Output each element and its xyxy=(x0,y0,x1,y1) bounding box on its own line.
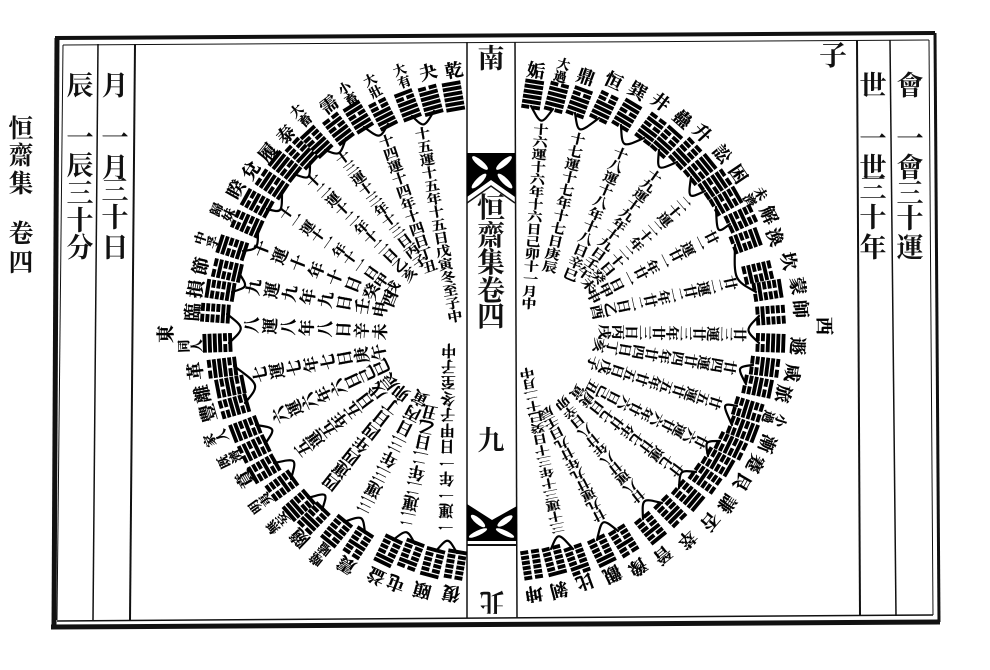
diagram: right half hexagram ring: ䷋ xyxy=(668,476,711,518)
diagram: left half hexagram ring: ䷕ xyxy=(240,451,285,489)
diagram: right half hexagram ring: ䷟ xyxy=(586,83,623,127)
diagram: right half hexagram ring: ䷢ xyxy=(631,508,672,551)
diagram: right half hexagram ring: ䷷ xyxy=(739,372,780,402)
column: 世 一世三十年: 年 xyxy=(860,233,886,263)
hexagram name labels: right half: 小過 xyxy=(759,407,790,429)
column: 辰 一辰三十分: 辰 xyxy=(66,71,94,101)
hexagram name labels: right half: 謙 xyxy=(715,490,741,516)
radial year text: left half: 一運一年一日甲子冬至子中 xyxy=(439,343,458,535)
hexagram name labels: right half: 漸 xyxy=(756,430,780,456)
radial year text: right half: 廿八運廿八年廿八日辛卯 xyxy=(553,392,649,505)
hexagram name labels: right half xyxy=(524,55,834,605)
diagram: left half hexagram ring: ䷥ xyxy=(233,183,278,221)
hexagram name labels: left half: 大壯 xyxy=(359,71,385,101)
hexagram name labels: left half: 兌 xyxy=(237,158,263,184)
hexagram name labels: right half: 萃 xyxy=(675,526,702,553)
diagram: left half hexagram ring: ䷀ xyxy=(439,74,467,115)
diagram: right half hexagram ring: ䷞ xyxy=(746,353,787,380)
side title: 恒齋集 卷四: 集 xyxy=(8,170,34,198)
diagram: right half hexagram ring: ䷭ xyxy=(665,131,708,174)
hexagram name labels: right half: 蠱 xyxy=(669,105,696,131)
column: 月 一月三十日: 月 xyxy=(102,153,128,183)
radial year text: left half: 三運三年三日丙寅 xyxy=(354,386,434,518)
hexagram name labels: left half: 東 xyxy=(156,325,174,345)
hexagram name labels: left half: 節 xyxy=(189,255,212,279)
diagram: right half hexagram ring: ䷯ xyxy=(631,105,672,149)
hexagram name labels: left half: 豐 xyxy=(196,402,219,426)
diagram: right half hexagram ring: ䷬ xyxy=(650,491,693,534)
hexagram name labels: left half: 益 xyxy=(364,565,390,590)
hexagram name labels: right half: 師 xyxy=(791,297,811,319)
hexagram name labels: left half: 歸妹 xyxy=(207,201,238,226)
radial year text: left half xyxy=(243,126,463,535)
hexagram name labels: right half: 升 xyxy=(689,118,716,145)
hexagram name labels: left half: 明夷 xyxy=(246,489,277,518)
hexagram name labels: left half: 震 xyxy=(334,553,360,579)
hexagram name labels: left half: 損 xyxy=(184,279,206,301)
radial year text: right half: 廿一運廿一年廿一日甲申 xyxy=(583,226,721,306)
column: 月 一月三十日: 月 xyxy=(102,71,128,101)
hexagram name labels: right half: 鼎 xyxy=(573,64,598,88)
hexagram name labels: left half: 同人 xyxy=(177,339,204,355)
spine title: 恒齋集卷四: 四 xyxy=(477,302,505,333)
spine title: 恒齋集卷四: 集 xyxy=(477,247,505,279)
diagram: left half hexagram ring: ䷹ xyxy=(248,163,292,203)
spine title: 恒齋集卷四: 齋 xyxy=(477,220,505,252)
hexagram name labels: right half: 未濟 xyxy=(739,183,770,210)
column: 月 一月三十日: 日 xyxy=(102,233,128,263)
diagram: right half hexagram ring: ䷿ xyxy=(705,181,750,219)
radial year text: left half: 七運七年七日庚午 xyxy=(250,342,388,386)
column: 世 一世三十年 xyxy=(860,71,886,263)
column: 辰 一辰三十分: 辰 xyxy=(66,151,94,181)
hexagram name labels: left half: 無妄 xyxy=(263,509,294,539)
side title: 恒齋集 卷四: 卷 xyxy=(8,220,34,248)
heading: 子: 子 xyxy=(819,41,847,72)
column: 月 一月三十日: 十 xyxy=(102,203,128,233)
hexagram name labels: left half: 復 xyxy=(440,583,463,606)
spine title: 恒齋集卷四 xyxy=(477,192,505,333)
diagram: right half hexagram ring: ䷧ xyxy=(721,200,765,236)
hexagram name labels: left half: 睽 xyxy=(222,177,248,204)
diagram: right half hexagram ring: ䷑ xyxy=(647,119,689,162)
hexagram name labels: left half: 中孚 xyxy=(191,230,221,252)
side title: 恒齋集 卷四: 齋 xyxy=(8,142,34,170)
hexagram name labels: right half: 剝 xyxy=(548,579,572,601)
radial year text: right half: 廿六運廿六年廿六日己丑 xyxy=(583,375,711,451)
diagram: right half hexagram ring: ䷜ xyxy=(738,257,781,287)
column: 世 一世三十年: 十 xyxy=(860,203,886,233)
radial year text: right half: 十七運十七年十七日庚辰 xyxy=(539,130,586,275)
spine label: 南: 南 xyxy=(478,44,504,74)
hexagram name labels: right half: 巽 xyxy=(622,76,650,104)
diagram: right half hexagram ring: ䷽ xyxy=(728,394,771,426)
radial year text: right half xyxy=(518,122,747,535)
hexagram name labels: right half: 艮 xyxy=(730,468,756,494)
diagram: left half hexagram ring: ䷼ xyxy=(209,231,252,264)
hexagram name labels: left half: 隨 xyxy=(286,525,314,553)
radial year text: left half: 十三運十三年十三日丙子 xyxy=(332,148,429,272)
side title: 恒齋集 卷四 xyxy=(8,114,34,277)
hexagram name labels: left half xyxy=(156,59,464,606)
diagram: left half hexagram ring: ䷚ xyxy=(416,543,448,586)
spine title: 恒齋集卷四: 恒 xyxy=(477,192,505,224)
diagram: left half hexagram ring: ䷗ xyxy=(441,546,469,587)
radial year text: left half: 五運五年五日戊辰 xyxy=(291,370,403,463)
hexagram name labels: left half: 既濟 xyxy=(215,447,246,473)
diagram: right half hexagram ring: ䷎ xyxy=(685,460,729,500)
hexagram name labels: right half: 觀 xyxy=(600,562,626,588)
diagram: right half hexagram ring: ䷆ xyxy=(753,303,792,328)
column: 月 一月三十日: 一 xyxy=(102,123,128,153)
hexagram name labels: right half: 坤 xyxy=(524,584,546,605)
diagram: left half hexagram ring: ䷄ xyxy=(317,105,358,149)
spine title: 恒齋集卷四: 卷 xyxy=(477,275,505,307)
radial year text: right half: 廿二運廿二年廿二日乙酉 xyxy=(588,272,739,320)
radial year text: right half: 廿三運廿三年廿三日丙戌 xyxy=(597,322,747,341)
radial year text: left half: 四運四年四日丁卯 xyxy=(319,382,415,496)
radial year text: right half: 十八運十八年十八日辛巳 xyxy=(559,144,630,283)
diagram: left half hexagram ring: ䷒ xyxy=(194,301,233,326)
diagram: right half hexagram ring: ䷮ xyxy=(695,163,739,203)
diagram: left half hexagram ring: ䷊ xyxy=(279,131,322,174)
diagram: right half hexagram ring: ䷱ xyxy=(563,79,597,122)
column: 辰 一辰三十分: 十 xyxy=(66,206,94,236)
diagram: right half hexagram ring: ䷠ xyxy=(753,331,792,355)
hexagram name labels: right half: 大過 xyxy=(550,55,572,86)
diagram: left half hexagram ring: ䷌ xyxy=(196,331,235,355)
radial year text: left half: 十四運十四年十四日丁丑 xyxy=(375,132,439,276)
hexagram name labels: right half: 恒 xyxy=(600,67,626,92)
column: 會 一會三十運: 一 xyxy=(896,124,924,154)
hexagram name labels: left half: 賁 xyxy=(231,466,260,495)
diagram: left half hexagram ring: ䷶ xyxy=(211,391,254,423)
radial year text: right half: 廿九運廿九年廿九日壬辰 xyxy=(537,403,610,524)
hexagram name labels: right half: 豫 xyxy=(626,554,652,580)
column: 世 一世三十年: 三 xyxy=(860,174,886,204)
diagram: left half hexagram ring: ䷡ xyxy=(364,90,401,135)
hexagram name labels: right half: 西 xyxy=(816,315,834,335)
diagram: left half hexagram ring: ䷍ xyxy=(390,82,424,125)
diagram: left half hexagram ring: ䷉ xyxy=(261,145,305,186)
hexagram name labels: right half: 困 xyxy=(725,160,751,186)
column: 辰 一辰三十分: 三 xyxy=(66,179,94,209)
radial year text: left half: 九運九年九日壬申 xyxy=(243,277,390,322)
diagram: left half hexagram ring: ䷻ xyxy=(204,255,247,285)
hexagram name labels: left half: 需 xyxy=(314,92,342,119)
radial year text: right half: 廿五運廿五年廿五日戊子 xyxy=(585,352,724,411)
hexagram name labels: left half: 臨 xyxy=(181,302,202,324)
diagram: left half hexagram ring: ䷰ xyxy=(200,354,241,381)
diagram: left half hexagram ring: ䷩ xyxy=(369,531,406,575)
diagram: right half hexagram ring: ䷁ xyxy=(518,546,546,587)
hexagram name labels: left half: 夬 xyxy=(415,61,439,83)
diagram: right half hexagram ring: ䷺ xyxy=(726,223,769,257)
diagram: right half hexagram ring: ䷴ xyxy=(723,413,766,447)
diagram: right half hexagram ring xyxy=(518,72,792,587)
diagram: right half hexagram ring: ䷫ xyxy=(519,72,547,113)
hexagram name labels: left half: 泰 xyxy=(271,121,298,148)
column: 世 一世三十年: 一 xyxy=(860,124,886,154)
column: 會 一會三十運: 會 xyxy=(896,71,924,101)
center spine xyxy=(467,44,517,615)
hexagram name labels: right half: 晉 xyxy=(651,542,678,568)
hexagram name labels: right half: 渙 xyxy=(763,223,787,248)
column: 世 一世三十年: 世 xyxy=(860,71,886,101)
radial year text: left half: 八運八年八日辛未 xyxy=(243,316,388,343)
hexagram name labels: right half: 蒙 xyxy=(788,274,810,296)
radial year text: right half: 廿四運廿四年廿四日丁亥 xyxy=(591,335,738,375)
diagram: right half hexagram ring: ䷖ xyxy=(539,541,571,584)
hexagram name labels: right half: 訟 xyxy=(708,139,735,167)
hexagram name labels: left half: 革 xyxy=(185,361,205,383)
hexagram name labels: left half: 家人 xyxy=(201,427,231,451)
hexagram name labels: right half: 遯 xyxy=(789,335,808,355)
radial year text: right half: 三十運三十年三十日癸巳十二月中 xyxy=(519,366,568,535)
diagram: right half hexagram ring: ䷏ xyxy=(605,520,644,565)
hexagram name labels: left half: 乾 xyxy=(442,59,464,81)
column: 辰 一辰三十分: 分 xyxy=(66,233,94,263)
diagram: right half hexagram ring: ䷃ xyxy=(749,276,790,304)
column: 會 一會三十運: 運 xyxy=(896,233,924,263)
hexagram name labels: right half: 比 xyxy=(574,570,599,594)
diagram: right half hexagram ring: ䷓ xyxy=(584,531,621,575)
radial year text: right half: 二十運二十年二十日癸未 xyxy=(577,192,694,295)
diagram: left half hexagram ring: ䷨ xyxy=(198,276,239,304)
hexagram name labels: right half: 咸 xyxy=(782,361,803,383)
diagram: left half hexagram ring: ䷤ xyxy=(222,413,265,447)
column: 會 一會三十運: 三 xyxy=(896,179,924,209)
diagram: left half hexagram ring: ䷔ xyxy=(315,511,356,554)
radial year text: right half: 廿七運廿七年廿七日庚寅 xyxy=(566,379,687,479)
column: 世 一世三十年: 世 xyxy=(860,153,886,183)
diagram: left half hexagram ring: ䷐ xyxy=(291,498,334,541)
hexagram name labels: left half: 頤 xyxy=(411,579,435,602)
side title: 恒齋集 卷四: 恒 xyxy=(8,114,34,143)
column: 辰 一辰三十分: 一 xyxy=(66,123,94,153)
diagram: left half hexagram ring xyxy=(194,74,469,587)
column: 會 一會三十運 xyxy=(896,71,924,263)
diagram: left half hexagram ring: ䷪ xyxy=(414,77,446,120)
hexagram name labels: right half: 蹇 xyxy=(744,450,770,476)
diagram: right half hexagram ring: ䷸ xyxy=(608,91,647,136)
hexagram name labels: left half: 大有 xyxy=(389,61,413,91)
hexagram name labels: left half: 履 xyxy=(254,139,280,166)
diagram: left half hexagram ring: ䷙ xyxy=(294,119,337,162)
radial year text: left half: 十運十年十日癸酉 xyxy=(249,238,401,312)
hexagram name labels: right half: 坎 xyxy=(778,248,800,272)
diagram: right half hexagram ring: ䷛ xyxy=(541,74,573,117)
hexagram name labels: left half: 噬嗑 xyxy=(307,540,335,570)
radial year text: right half: 十六運十六年十六日己卯十一月中 xyxy=(518,122,548,310)
hexagram name labels: right half: 井 xyxy=(647,88,673,114)
diagram: left half hexagram ring: ䷝ xyxy=(208,372,249,402)
hexagram name labels: right half: 解 xyxy=(757,201,782,227)
brackets joining hexagram pairs xyxy=(227,106,759,553)
side title: 恒齋集 卷四: 四 xyxy=(8,250,34,277)
radial year text: left half: 六運六年六日己巳 xyxy=(268,356,394,429)
column: 會 一會三十運: 十 xyxy=(896,204,924,234)
icon: lower fishtail ornament xyxy=(467,504,517,545)
column: 會 一會三十運: 會 xyxy=(896,153,924,183)
diagram: left half hexagram ring: ䷈ xyxy=(338,93,377,138)
hexagram name labels: right half: 旅 xyxy=(772,381,795,405)
column: 辰 一辰三十分 xyxy=(66,71,94,263)
radial year text: left half: 十一運十一年十一日甲戌 xyxy=(275,203,402,300)
column: 月 一月三十日: 三 xyxy=(102,176,128,206)
diagram: left half hexagram ring: ䷂ xyxy=(393,535,427,578)
column: 月 一月三十日 xyxy=(102,71,128,263)
diagram: left half hexagram ring: ䷘ xyxy=(276,486,319,528)
diagram: left half hexagram ring: ䷵ xyxy=(223,205,267,241)
hexagram name labels: left half: 離 xyxy=(191,383,213,407)
hexagram name labels: left half: 小畜 xyxy=(334,79,361,110)
page frame xyxy=(51,33,940,628)
diagram: right half hexagram ring: ䷇ xyxy=(561,540,595,583)
diagram: right half hexagram ring: ䷳ xyxy=(697,444,742,482)
hexagram name labels: right half: 姤 xyxy=(524,59,546,80)
radial year text: left half: 二運二年二日乙丑 xyxy=(397,403,441,529)
page number: 九: 九 xyxy=(478,426,504,456)
icon: upper fishtail ornament xyxy=(467,153,515,203)
spine label: 北: 北 xyxy=(479,587,505,615)
diagram: left half hexagram ring: ䷣ xyxy=(258,466,302,507)
radial year text: left half: 十二運十二年十二日乙亥 xyxy=(302,171,420,286)
hexagram name labels: left half: 屯 xyxy=(384,572,410,596)
hexagram name labels: left half: 大畜 xyxy=(285,101,315,132)
diagram: left half hexagram ring: ䷲ xyxy=(337,523,377,567)
hexagram name labels: right half: 否 xyxy=(698,508,725,535)
diagram: right half hexagram ring: ䷦ xyxy=(711,428,755,465)
diagram: right half hexagram ring: ䷅ xyxy=(680,148,723,189)
radial year text: right half: 十九運十九年十九日壬午 xyxy=(573,165,664,282)
diagram: left half hexagram ring: ䷾ xyxy=(230,431,274,468)
radial year text: left half: 十五運十五年十五日戊寅冬至子中 xyxy=(412,126,463,325)
